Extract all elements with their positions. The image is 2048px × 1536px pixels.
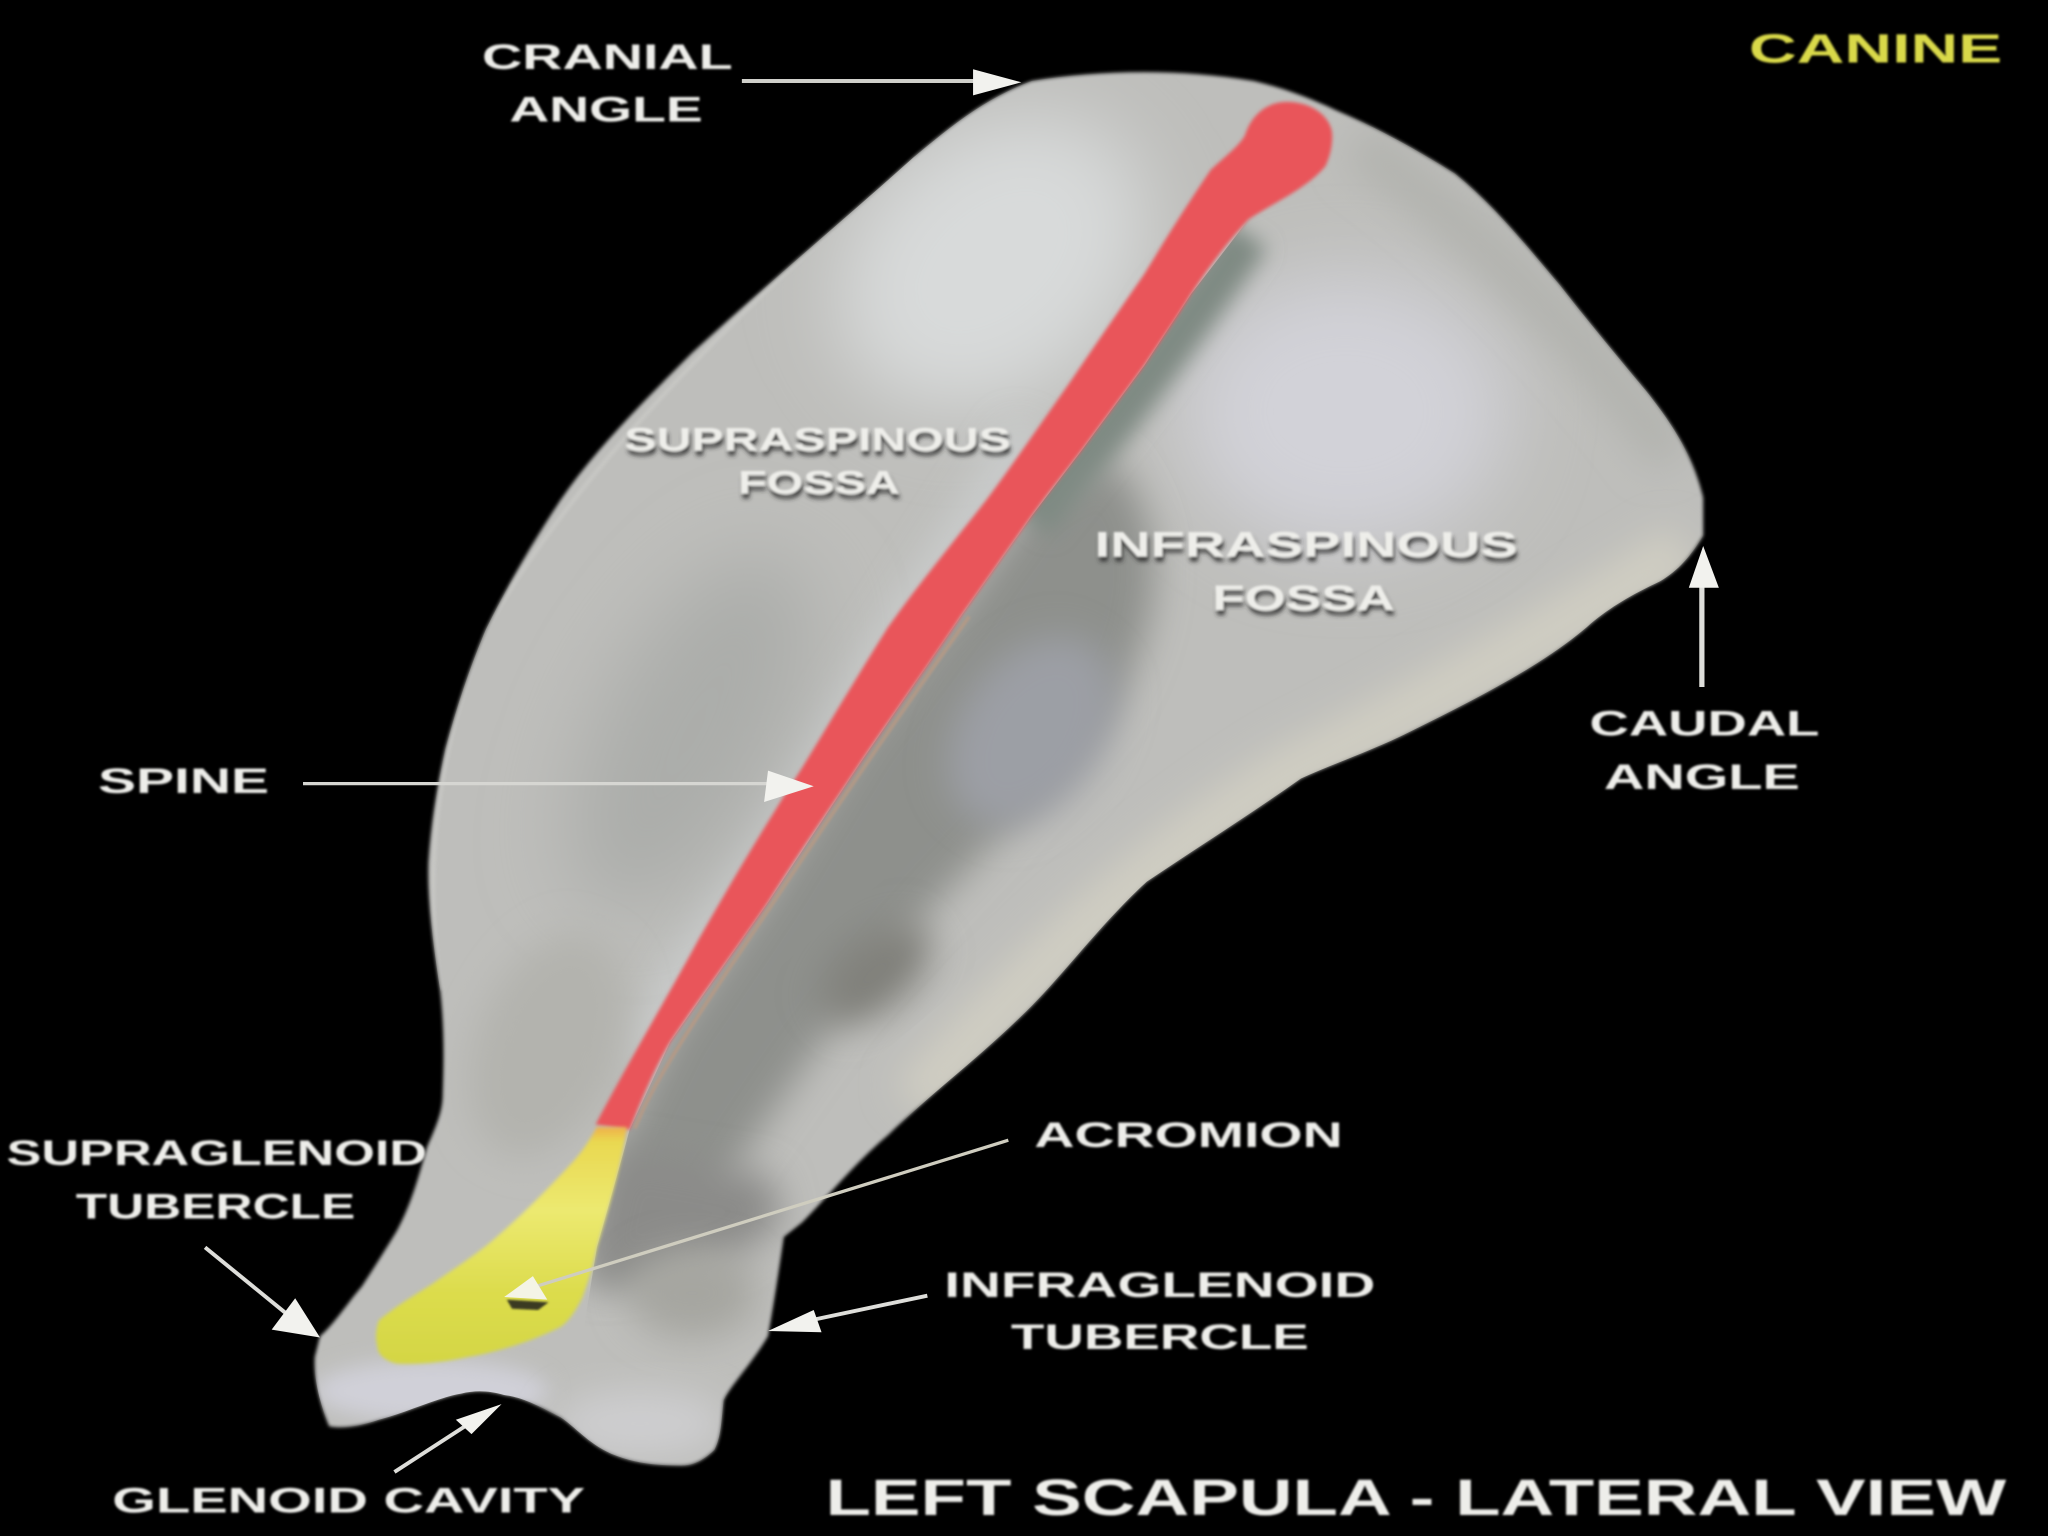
light patch: supraspinous upper xyxy=(798,74,1166,428)
label: canine: CANINE xyxy=(1749,26,2002,72)
infraspinous lavender patch xyxy=(1182,274,1509,549)
title: LEFT SCAPULA - LATERAL VIEW xyxy=(825,1469,2008,1526)
caudal light tan border xyxy=(914,549,1685,1104)
label: caudal angle: ANGLE xyxy=(1604,758,1800,797)
label: infraspinous fossa xyxy=(1095,525,1518,618)
bone shading xyxy=(313,52,1685,1458)
arrow: caudal angle xyxy=(1689,546,1719,687)
label: spine: SPINE xyxy=(98,762,269,801)
label: glenoid cavity: GLENOID CAVITY xyxy=(112,1481,585,1520)
arrow: infraglenoid tubercle xyxy=(768,1296,927,1332)
label: supraspinous fossa: SUPRASPINOUS xyxy=(624,421,1011,458)
scapula bone xyxy=(313,52,1703,1465)
label: acromion: ACROMION xyxy=(1034,1116,1343,1155)
label: supraspinous fossa: FOSSA xyxy=(738,464,900,501)
arrow: glenoid cavity xyxy=(394,1404,502,1472)
shadow beside upper spine xyxy=(1032,235,1247,522)
glenoid lower right highlight xyxy=(555,1390,725,1458)
rim highlight xyxy=(433,157,914,990)
spine lower salmon edge xyxy=(635,616,969,1128)
arrow: spine xyxy=(303,771,814,802)
arrow: supraglenoid tubercle xyxy=(205,1247,320,1337)
label: infraglenoid tubercle: INFRAGLENOID xyxy=(944,1266,1375,1305)
label: infraspinous fossa: FOSSA xyxy=(1212,579,1395,618)
arrow: acromion xyxy=(504,1140,1008,1310)
lower-left shaft texture tone xyxy=(476,943,630,1148)
label: supraglenoid tubercle xyxy=(7,1134,427,1227)
spine highlighted red xyxy=(596,102,1332,1130)
glenoid lavender highlight xyxy=(313,1360,549,1422)
label: caudal angle: CAUDAL xyxy=(1590,704,1819,743)
label: infraglenoid tubercle: TUBERCLE xyxy=(1011,1318,1309,1357)
acromion highlighted yellow xyxy=(376,1127,627,1364)
label: caudal angle xyxy=(1590,704,1819,797)
dark spot xyxy=(820,916,947,1040)
label: infraspinous fossa: INFRASPINOUS xyxy=(1095,525,1518,564)
bone body xyxy=(315,72,1703,1465)
label: cranial angle: CRANIAL xyxy=(482,38,733,77)
label: supraglenoid tubercle: TUBERCLE xyxy=(76,1188,355,1227)
below-spine shading xyxy=(581,235,1247,1287)
rim texture tone xyxy=(1358,144,1672,457)
blue-grey hollow xyxy=(942,631,1120,828)
neck texture xyxy=(627,1247,758,1339)
light band: above spine xyxy=(640,431,1032,1058)
label: supraspinous fossa xyxy=(624,421,1011,501)
arrow: cranial angle xyxy=(742,69,1021,95)
dark band under spine xyxy=(601,457,1154,1287)
label: cranial angle: ANGLE xyxy=(509,90,703,129)
label: cranial angle xyxy=(482,38,733,129)
label: supraglenoid tubercle: SUPRAGLENOID xyxy=(7,1134,427,1173)
label: infraglenoid tubercle xyxy=(944,1266,1375,1357)
grey patch: supraspinous centre xyxy=(570,562,815,901)
neck shadow xyxy=(581,1149,784,1287)
